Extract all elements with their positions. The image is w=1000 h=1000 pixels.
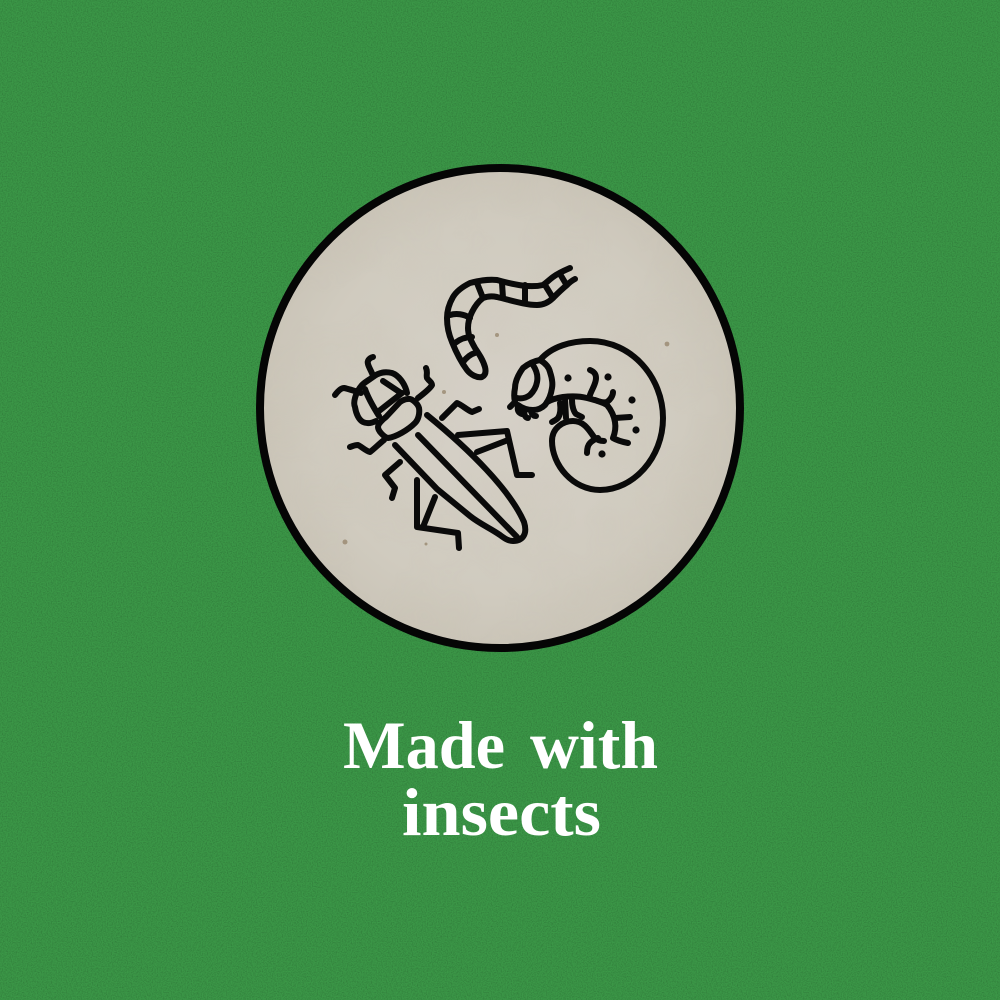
icon: insects xyxy=(335,268,663,548)
heading: Made with insects xyxy=(343,707,658,850)
icon: grub spots xyxy=(564,373,640,458)
heading: Made with insects: with xyxy=(530,707,658,783)
stone circle badge xyxy=(256,164,744,652)
icon: grub xyxy=(510,341,663,490)
icon: mealworm xyxy=(447,268,575,377)
heading: Made with insects: Made xyxy=(343,707,505,783)
icon: cricket xyxy=(335,357,532,548)
heading: Made with insects: insects xyxy=(402,774,601,850)
